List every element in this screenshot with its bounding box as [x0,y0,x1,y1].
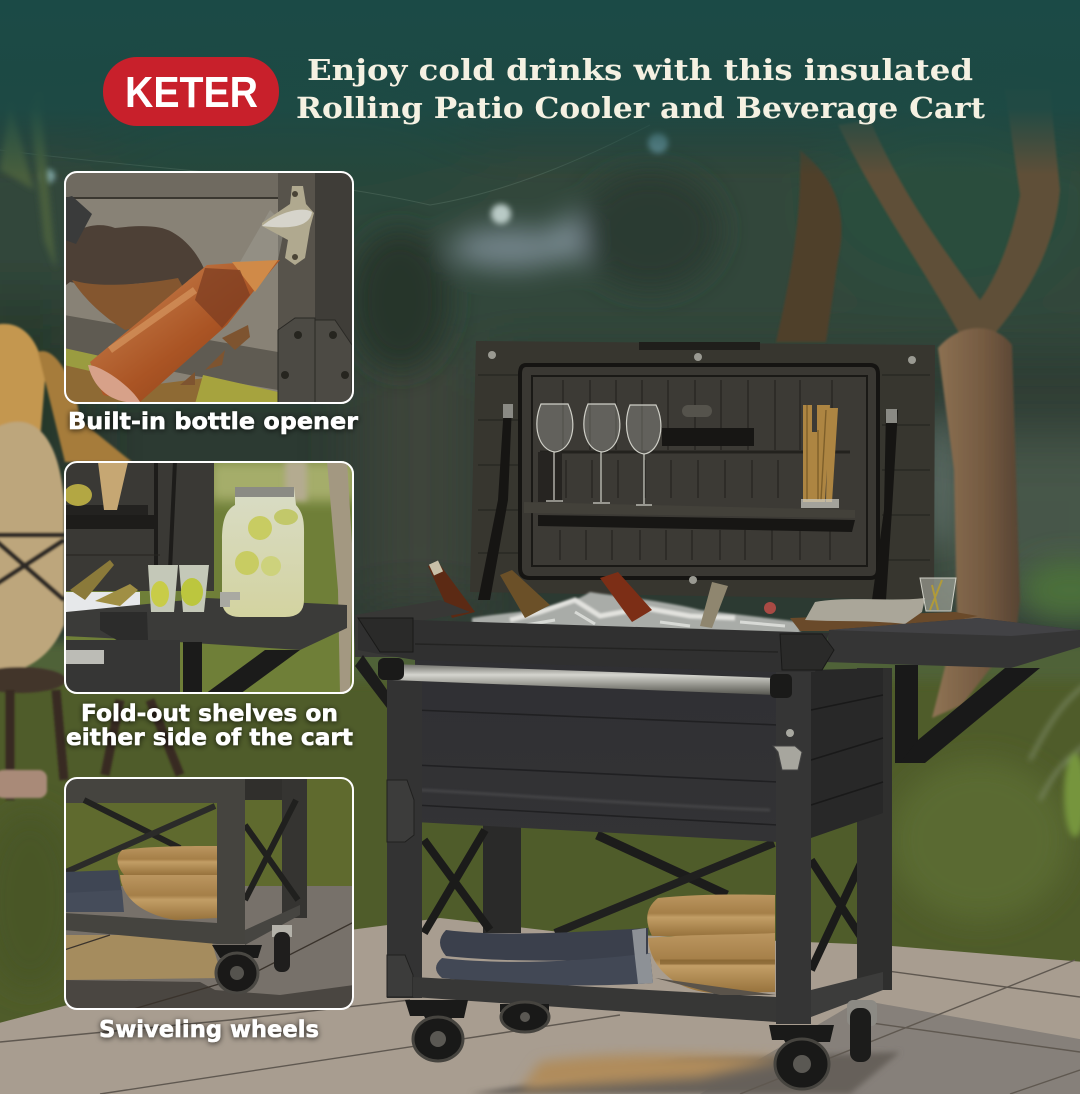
grass lawn [0,655,1080,1094]
title: Enjoy cold drinks with this insulated [307,53,973,87]
caption: fold-out shelves: Fold-out shelves on [81,701,338,727]
cooler front panel [415,632,778,842]
breadsticks in glass [801,405,839,508]
drinking glasses [148,565,209,612]
cooler top rim and corner bracket [358,618,834,672]
overlay: dark green top band [0,0,1080,175]
wooden bowls [647,894,775,993]
panel: fold-out shelf photo [64,461,355,694]
front legs [387,668,811,1024]
towels [436,928,653,985]
title: Rolling Patio Cooler and Beverage Cart [296,91,986,125]
hand and wrist [66,225,204,286]
caption: fold-out shelves: either side of the cart [66,725,353,751]
foliage top left [0,90,56,270]
caster wheels [405,1000,877,1089]
lemonade jar [220,487,304,617]
product: beverage cart [355,341,1080,1089]
serving tray, napkins and drink [790,578,978,631]
lid struts [478,404,898,600]
people seated at left [0,324,180,800]
background: trees [776,90,1060,718]
caption: bottle opener: Built-in bottle opener [68,409,359,435]
handle bar [378,658,792,698]
wheels [212,945,262,958]
wine glasses [537,404,661,505]
bottom shelf [413,972,883,1022]
cart frame [64,913,217,944]
rear legs and cross braces [424,668,892,990]
foreground plant at right edge [1030,685,1080,837]
panel: swiveling wheels photo [64,777,354,1011]
title [296,53,986,125]
left fold-out shelf [355,600,470,708]
bottle opener on cart [773,729,802,770]
logo: Keter [103,57,279,126]
patio floor [0,918,1080,1094]
caption: swiveling wheels: Swiveling wheels [99,1017,319,1043]
cart lid [470,341,935,600]
cooler side panel [811,668,883,838]
right fold-out shelf [825,618,1080,763]
bowls [117,846,217,875]
opener [262,186,314,265]
panel: built-in bottle opener photo [64,171,354,404]
ice and bottles [428,560,800,634]
caption: fold-out shelves [66,701,353,751]
bottle [90,260,280,402]
towels [64,870,122,894]
logo: Keter: KETER [125,68,258,117]
